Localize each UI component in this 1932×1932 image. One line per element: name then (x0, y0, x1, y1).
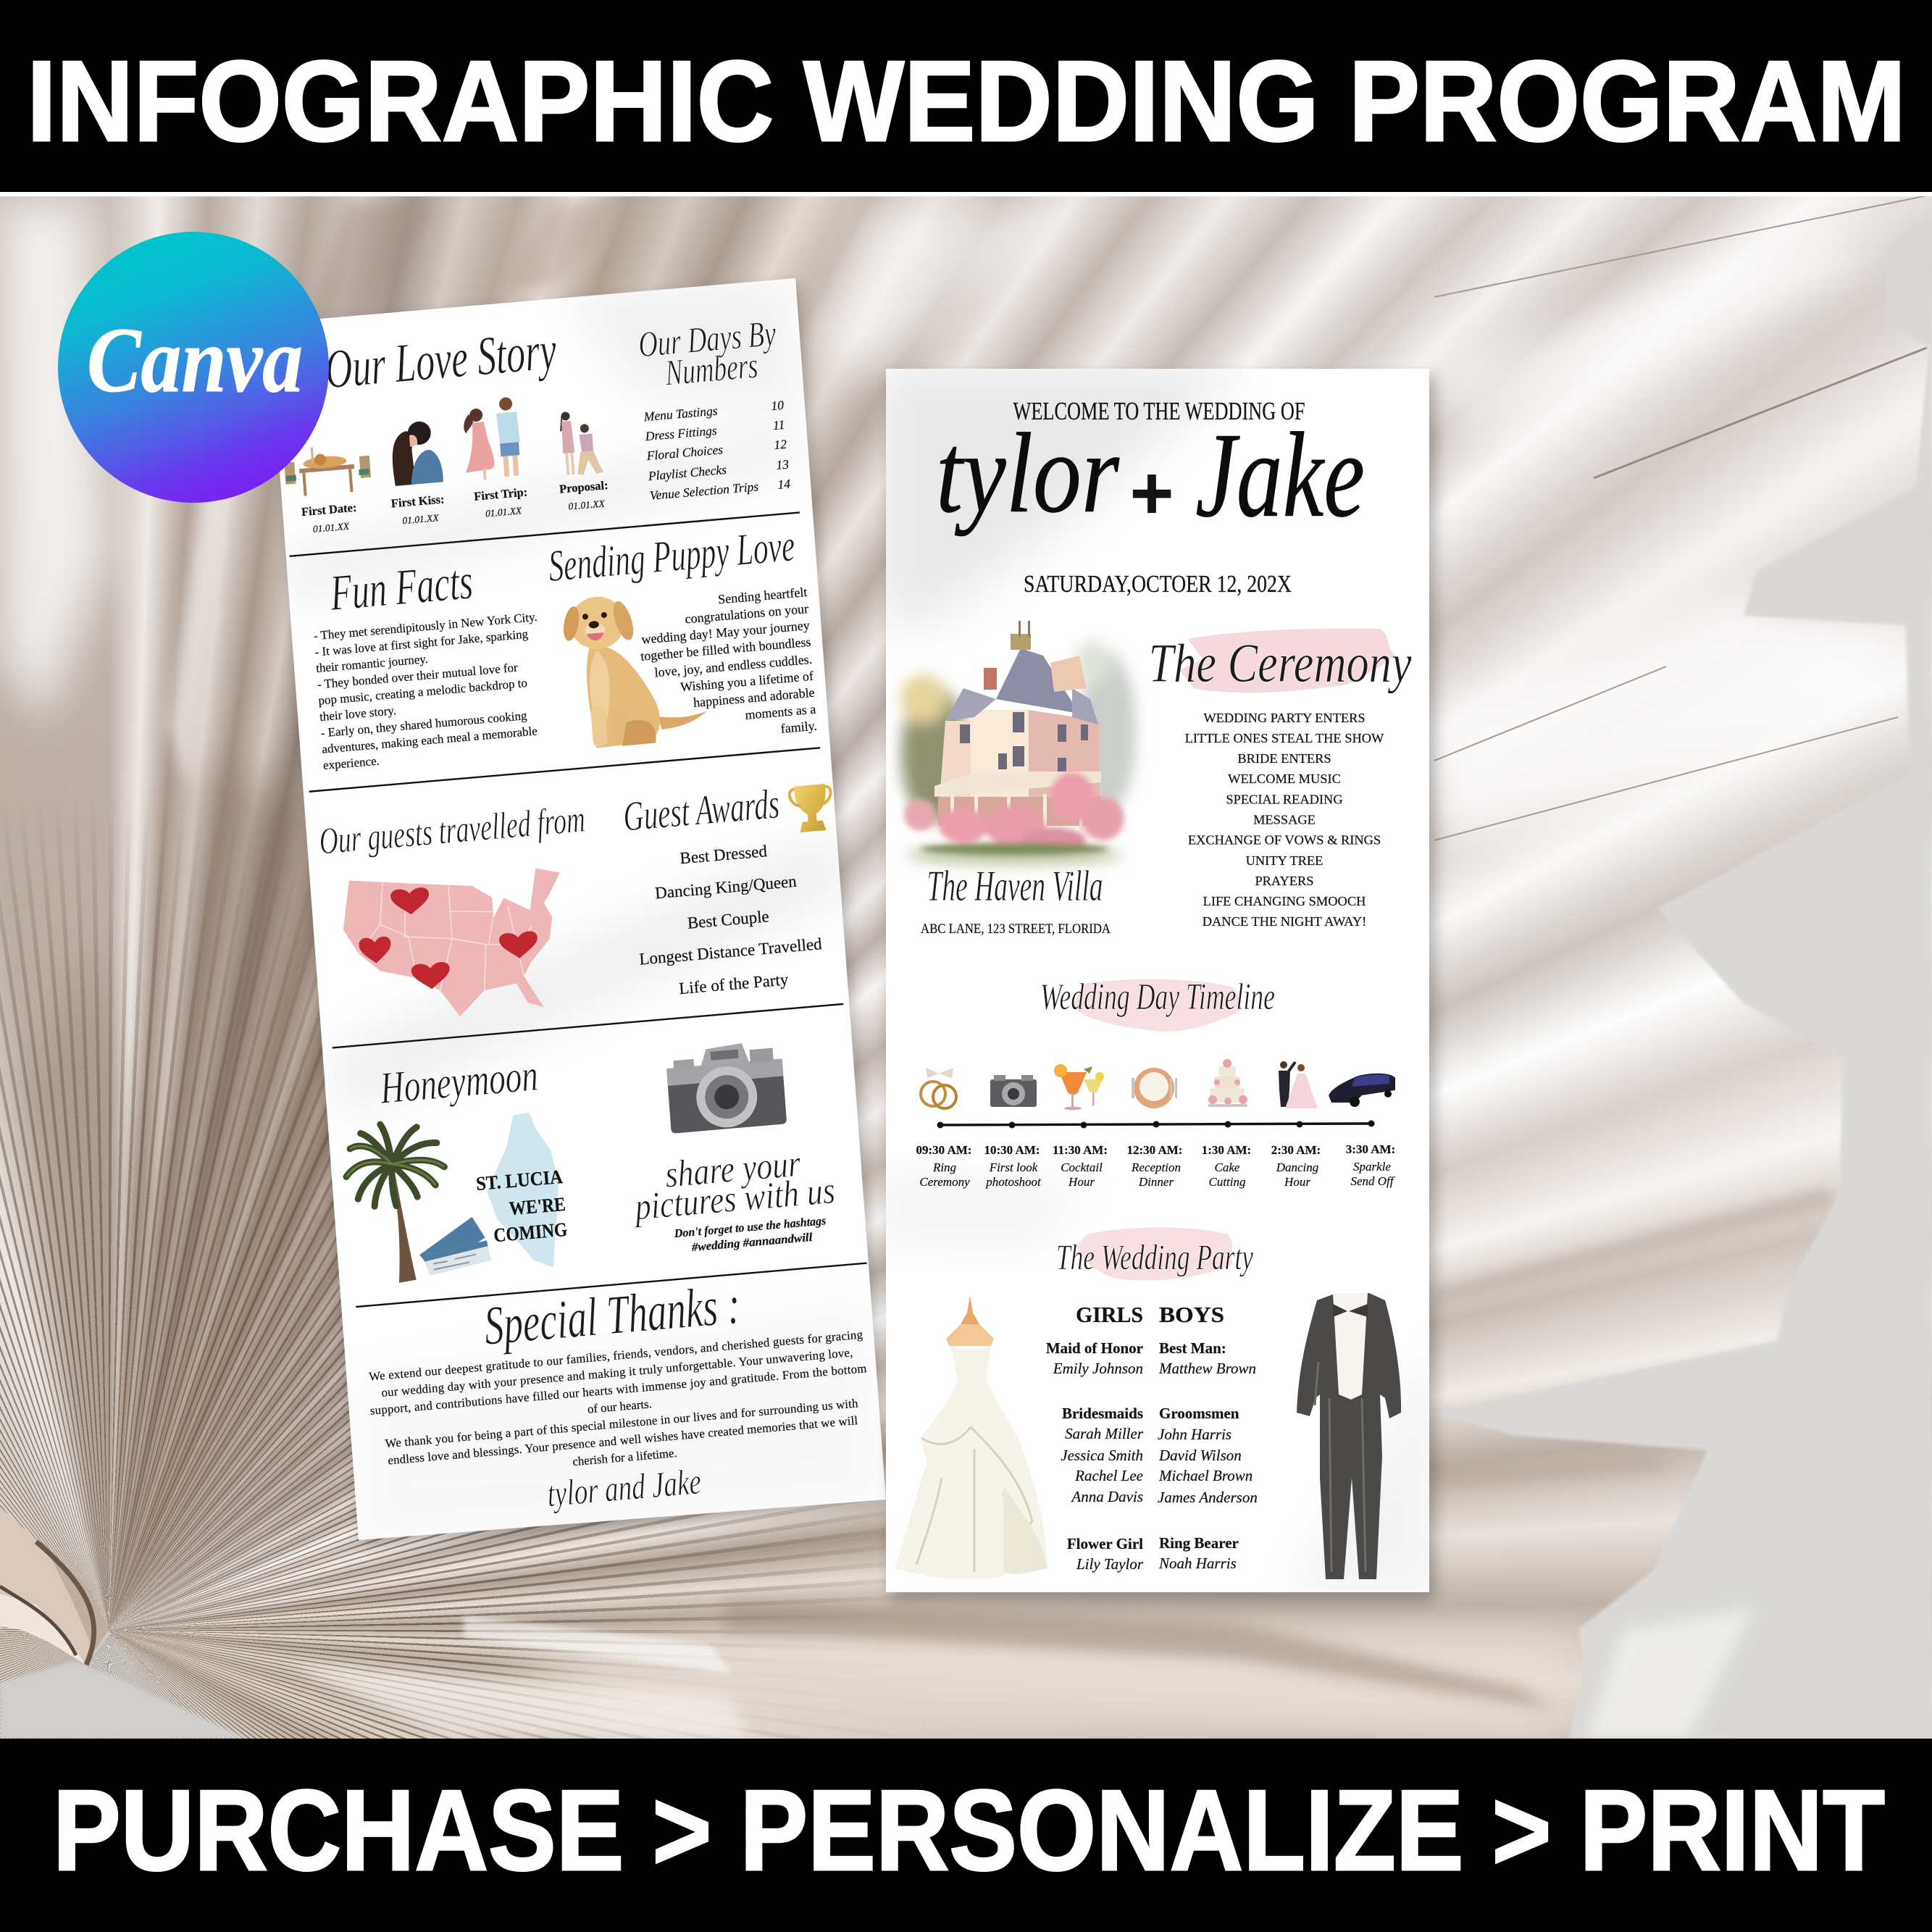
icon: vintage camera (665, 1040, 787, 1134)
list: ceremony order: MESSAGE (1253, 813, 1316, 827)
text block: thank you message: cherish for a lifetime. (572, 1446, 677, 1468)
labels: girls column (1046, 1302, 1144, 1573)
header: welcome: WELCOME TO THE WEDDING OF (1013, 397, 1305, 425)
text block: facts list (313, 610, 547, 772)
heading: venue name: The Haven Villa (927, 862, 1103, 910)
list: awards (632, 837, 825, 1001)
text block: facts list: their romantic journey. (316, 652, 428, 675)
program card: back side, tilted (269, 278, 890, 1546)
background: silk folds and highlights (0, 196, 1927, 1630)
list: ceremony order: WEDDING PARTY ENTERS (1203, 711, 1366, 725)
list: ceremony order: PRAYERS (1255, 874, 1314, 888)
list: awards: Longest Distance Travelled (639, 934, 823, 969)
text block: puppy message: happiness and adorable (693, 685, 815, 710)
labels: boys column: Michael Brown (1158, 1467, 1253, 1484)
labels: timeline events: Ceremony (919, 1175, 970, 1189)
list: ceremony order: LITTLE ONES STEAL THE SHOW (1185, 731, 1384, 745)
labels: girls column: Flower Girl (1067, 1535, 1143, 1552)
banner: bottom call to action (0, 1739, 1932, 1932)
list: awards: Dancing King/Queen (654, 872, 798, 903)
brush: pink swash (1073, 979, 1244, 1032)
text block: facts list: - They bonded over their mutual love for (317, 661, 519, 691)
icon: place setting (1132, 1068, 1177, 1108)
labels: timeline times: 12:30 AM: (1127, 1143, 1182, 1157)
map: united states with hearts (340, 863, 570, 1026)
panel: our love story (275, 316, 610, 537)
labels: girls column: Emily Johnson (1053, 1360, 1143, 1377)
title: couple names: Jake (1195, 408, 1365, 543)
text block: thank you message (367, 1327, 872, 1486)
text: venue address: ABC LANE, 123 STREET, FLORIDA (921, 921, 1111, 937)
labels: boys column: Matthew Brown (1158, 1360, 1256, 1377)
text block: puppy message: family. (780, 719, 818, 736)
labels: milestones: 01.01.XX (568, 498, 606, 512)
banner: top title (0, 0, 1932, 196)
labels: milestones: 01.01.XX (485, 505, 522, 519)
list: counts: 11 (772, 417, 785, 432)
labels: boys column: David Wilson (1158, 1447, 1242, 1464)
labels: milestones: First Date: (301, 501, 357, 519)
text: st lucia we're coming: ST. LUCIA (475, 1166, 564, 1195)
labels: boys column: Ring Bearer (1159, 1534, 1239, 1552)
text block: puppy message: together be filled with boundless (640, 635, 811, 664)
list: awards: Best Couple (687, 907, 769, 932)
text block: thank you message: We thank you for being a part of this special milestone in our lives and for surrounding us with (385, 1396, 859, 1450)
heading: our guests travelled from: Our guests travelled from (318, 798, 587, 863)
heading: share your pictures with us: share your (664, 1143, 803, 1196)
labels: timeline events: Cutting (1208, 1175, 1246, 1189)
list: counts: 14 (777, 476, 791, 492)
icon: st lucia island (481, 1111, 565, 1273)
labels: boys column: James Anderson (1158, 1489, 1258, 1506)
list: ceremony order: UNITY TREE (1246, 853, 1323, 868)
text block: puppy message: Wishing you a lifetime of (679, 669, 814, 694)
heading: our days by numbers: Numbers (664, 345, 759, 393)
text: st lucia we're coming: WE'RE (509, 1193, 566, 1219)
heading: honeymoon: Honeymoon (378, 1050, 540, 1113)
labels: boys column: Groomsmen (1159, 1405, 1239, 1422)
text: st lucia we're coming: COMING (493, 1218, 568, 1246)
list: counts: Floral Choices (645, 442, 724, 463)
heading: share your pictures with us (629, 1140, 837, 1229)
labels: girls column: Lily Taylor (1076, 1555, 1144, 1573)
labels: girls column: Rachel Lee (1074, 1467, 1143, 1484)
text block: thank you message: support, and contributions have filled our hearts with immense joy and gratitude. From the bottom (369, 1361, 867, 1418)
text block: puppy message: Sending heartfelt (717, 585, 808, 607)
labels: timeline times (916, 1142, 1395, 1157)
background: grey backdrop beyond fan tips (0, 217, 1932, 1739)
text: hashtags: Don't forget to use the hashtags (673, 1213, 827, 1240)
labels: timeline events: Ring (932, 1161, 956, 1174)
labels: timeline events: Dancing (1276, 1161, 1318, 1174)
text: hashtags (673, 1213, 827, 1255)
labels: boys column: John Harris (1158, 1426, 1231, 1443)
text block: thank you message: of our hearts. (587, 1397, 652, 1416)
text block: puppy message (636, 585, 818, 748)
text block: facts list: - They met serendipitously in New York City. (313, 610, 538, 643)
icon: cocktails (1054, 1064, 1104, 1110)
signature: tylor and jake: tylor and Jake (545, 1460, 703, 1514)
background: fine fan rays near hub (0, 837, 886, 1739)
icon: palm tree (343, 1119, 453, 1287)
labels: girls column: GIRLS (1076, 1302, 1143, 1327)
list: counts: 10 (771, 398, 785, 413)
icon: golden retriever puppy (559, 588, 709, 750)
labels: timeline events: Hour (1284, 1175, 1310, 1189)
heading: our days by numbers: Our Days By (637, 312, 777, 364)
heading: guest awards: Guest Awards (622, 780, 781, 840)
brush: pink swash (1179, 629, 1395, 693)
labels: milestones: 01.01.XX (312, 521, 350, 535)
text block: thank you message: endless love and blessings. Your presence and well wishes have created memories that we will (388, 1413, 858, 1468)
labels: milestones: Proposal: (559, 478, 609, 496)
labels: timeline events: Cocktail (1061, 1161, 1103, 1174)
heading: our days by numbers (637, 312, 780, 395)
title: couple names (936, 408, 1365, 543)
panel: fun facts (309, 548, 547, 772)
brush: pink swash (1076, 1227, 1233, 1281)
text block: facts list: experience. (322, 754, 380, 772)
background: fan hub ribbon (0, 1507, 111, 1665)
labels: timeline events: First look (989, 1161, 1038, 1174)
text block: facts list: pop music, creating a melodic backdrop to (318, 676, 528, 708)
labels: boys column (1158, 1302, 1258, 1572)
icon: first kiss couple (390, 419, 443, 486)
icon: first trip couple (461, 396, 523, 482)
logo: canva circle: Canva (87, 309, 303, 411)
heading: our love story: Our Love Story (323, 319, 559, 400)
labels: timeline times: 2:30 AM: (1271, 1143, 1321, 1157)
list: ceremony order: WELCOME MUSIC (1228, 771, 1341, 786)
title: couple names: tylor (936, 410, 1119, 537)
panel: special thanks (362, 1264, 875, 1529)
text block: puppy message: love, joy, and endless cuddles. (654, 652, 813, 679)
text block: thank you message: We extend our deepest gratitude to our families, friends, vendors, and cherished guests for gracing (369, 1327, 863, 1384)
labels: milestones: 01.01.XX (402, 512, 440, 526)
labels: timeline events: Send Off (1350, 1174, 1395, 1188)
labels: girls column: Sarah Miller (1065, 1425, 1144, 1442)
panel: wedding day timeline (916, 977, 1395, 1189)
text block: facts list: - Early on, they shared humorous cooking (320, 708, 528, 740)
labels: milestones (301, 478, 610, 535)
icon: trophy (789, 783, 833, 833)
icon: wedding rings (921, 1068, 956, 1108)
icon: proposal couple (559, 409, 603, 477)
heading: wedding day timeline: Wedding Day Timeline (1040, 977, 1275, 1018)
heading: the ceremony: The Ceremony (1149, 633, 1412, 694)
labels: boys column: Noah Harris (1158, 1555, 1237, 1572)
illustration: tuxedo (1297, 1293, 1401, 1579)
list: ceremony order: LIFE CHANGING SMOOCH (1203, 894, 1366, 908)
text block: facts list: their love story. (319, 703, 397, 724)
list: counts: Menu Tastings (643, 403, 718, 424)
labels: timeline events: Sparkle (1353, 1160, 1391, 1174)
labels: timeline times: 11:30 AM: (1053, 1143, 1108, 1157)
labels: timeline events: photoshoot (985, 1175, 1042, 1189)
date: SATURDAY,OCTOER 12, 202X (1024, 571, 1292, 598)
labels: boys column: BOYS (1159, 1302, 1224, 1327)
list: ceremony order (1185, 711, 1384, 929)
title: couple names: + (1130, 451, 1174, 535)
list: counts: 13 (776, 456, 790, 472)
list: counts: Venue Selection Trips (649, 479, 759, 503)
chart: timeline line with dots (937, 1120, 1375, 1129)
heading: share your pictures with us: pictures with us (631, 1170, 837, 1229)
labels: milestones: First Trip: (474, 485, 528, 503)
heading: the wedding party: The Wedding Party (1056, 1237, 1254, 1277)
panel: our days by numbers (636, 312, 791, 503)
text: hashtags: #wedding #annaandwill (690, 1230, 813, 1254)
list: awards: Life of the Party (678, 970, 790, 998)
labels: timeline events: Hour (1068, 1175, 1095, 1189)
illustration: pink victorian villa (900, 621, 1136, 863)
labels: boys column: Best Man: (1159, 1339, 1226, 1357)
labels: girls column: Jessica Smith (1061, 1447, 1143, 1464)
text block: facts list: adventures, making each meal a memorable (322, 724, 538, 756)
text block: thank you message: our wedding day with your presence and making it truly unforgettable. Your unwavering love, (381, 1345, 853, 1400)
heading: special thanks: Special Thanks : (482, 1274, 742, 1357)
labels: timeline events: Cake (1215, 1161, 1240, 1174)
list: counts (643, 398, 791, 503)
list: ceremony order: DANCE THE NIGHT AWAY! (1203, 914, 1366, 929)
panel: the ceremony (1149, 629, 1412, 929)
list: ceremony order: EXCHANGE OF VOWS & RINGS (1188, 833, 1381, 848)
labels: timeline times: 09:30 AM: (916, 1143, 971, 1157)
labels: girls column: Anna Davis (1070, 1488, 1143, 1505)
labels: timeline times: 10:30 AM: (984, 1143, 1040, 1157)
icon: first date table (283, 443, 372, 498)
labels: milestones: First Kiss: (390, 492, 445, 511)
labels: girls column: Bridesmaids (1062, 1405, 1143, 1422)
list: counts: Playlist Checks (647, 462, 727, 483)
icon: wedding cake (1208, 1059, 1247, 1107)
list: counts: 12 (774, 437, 787, 452)
icon: camera (990, 1075, 1037, 1107)
icon: limousine (1329, 1074, 1395, 1107)
logo: canva circle (58, 232, 329, 503)
labels: timeline events (919, 1160, 1395, 1189)
labels: timeline times: 3:30 AM: (1346, 1142, 1395, 1156)
icon: plane tickets (417, 1216, 492, 1276)
labels: girls column: Maid of Honor (1046, 1339, 1143, 1357)
text block: puppy message: congratulations on your (685, 601, 809, 627)
heading: fun facts: Fun Facts (328, 553, 474, 622)
list: counts: Dress Fittings (644, 423, 717, 443)
text block: facts list: - It was love at first sight for Jake, sparking (314, 627, 529, 659)
panel: guests travelled from (318, 798, 598, 1027)
illustration: wedding dress on mannequin (895, 1295, 1047, 1579)
panel: guest awards (622, 775, 845, 1001)
text block: puppy message: moments as a (745, 702, 816, 722)
background: pleated fan base (0, 196, 1932, 1739)
labels: timeline events: Reception (1131, 1161, 1181, 1174)
icon: dancing couple (1279, 1061, 1318, 1108)
panel: share your pictures (622, 1036, 839, 1259)
heading: sending puppy love: Sending Puppy Love (547, 521, 796, 591)
text: st lucia we're coming (475, 1166, 568, 1247)
panel: honeymoon (338, 1049, 570, 1287)
list: ceremony order: SPECIAL READING (1226, 793, 1343, 807)
text block: puppy message: wedding day! May your journey (641, 618, 810, 647)
list: ceremony order: BRIDE ENTERS (1237, 751, 1331, 766)
panel: the wedding party (895, 1227, 1401, 1579)
list: awards: Best Dressed (679, 842, 768, 867)
labels: timeline events: Dinner (1138, 1175, 1174, 1189)
labels: timeline times: 1:30 AM: (1202, 1143, 1251, 1157)
panel: sending puppy love (547, 520, 818, 755)
